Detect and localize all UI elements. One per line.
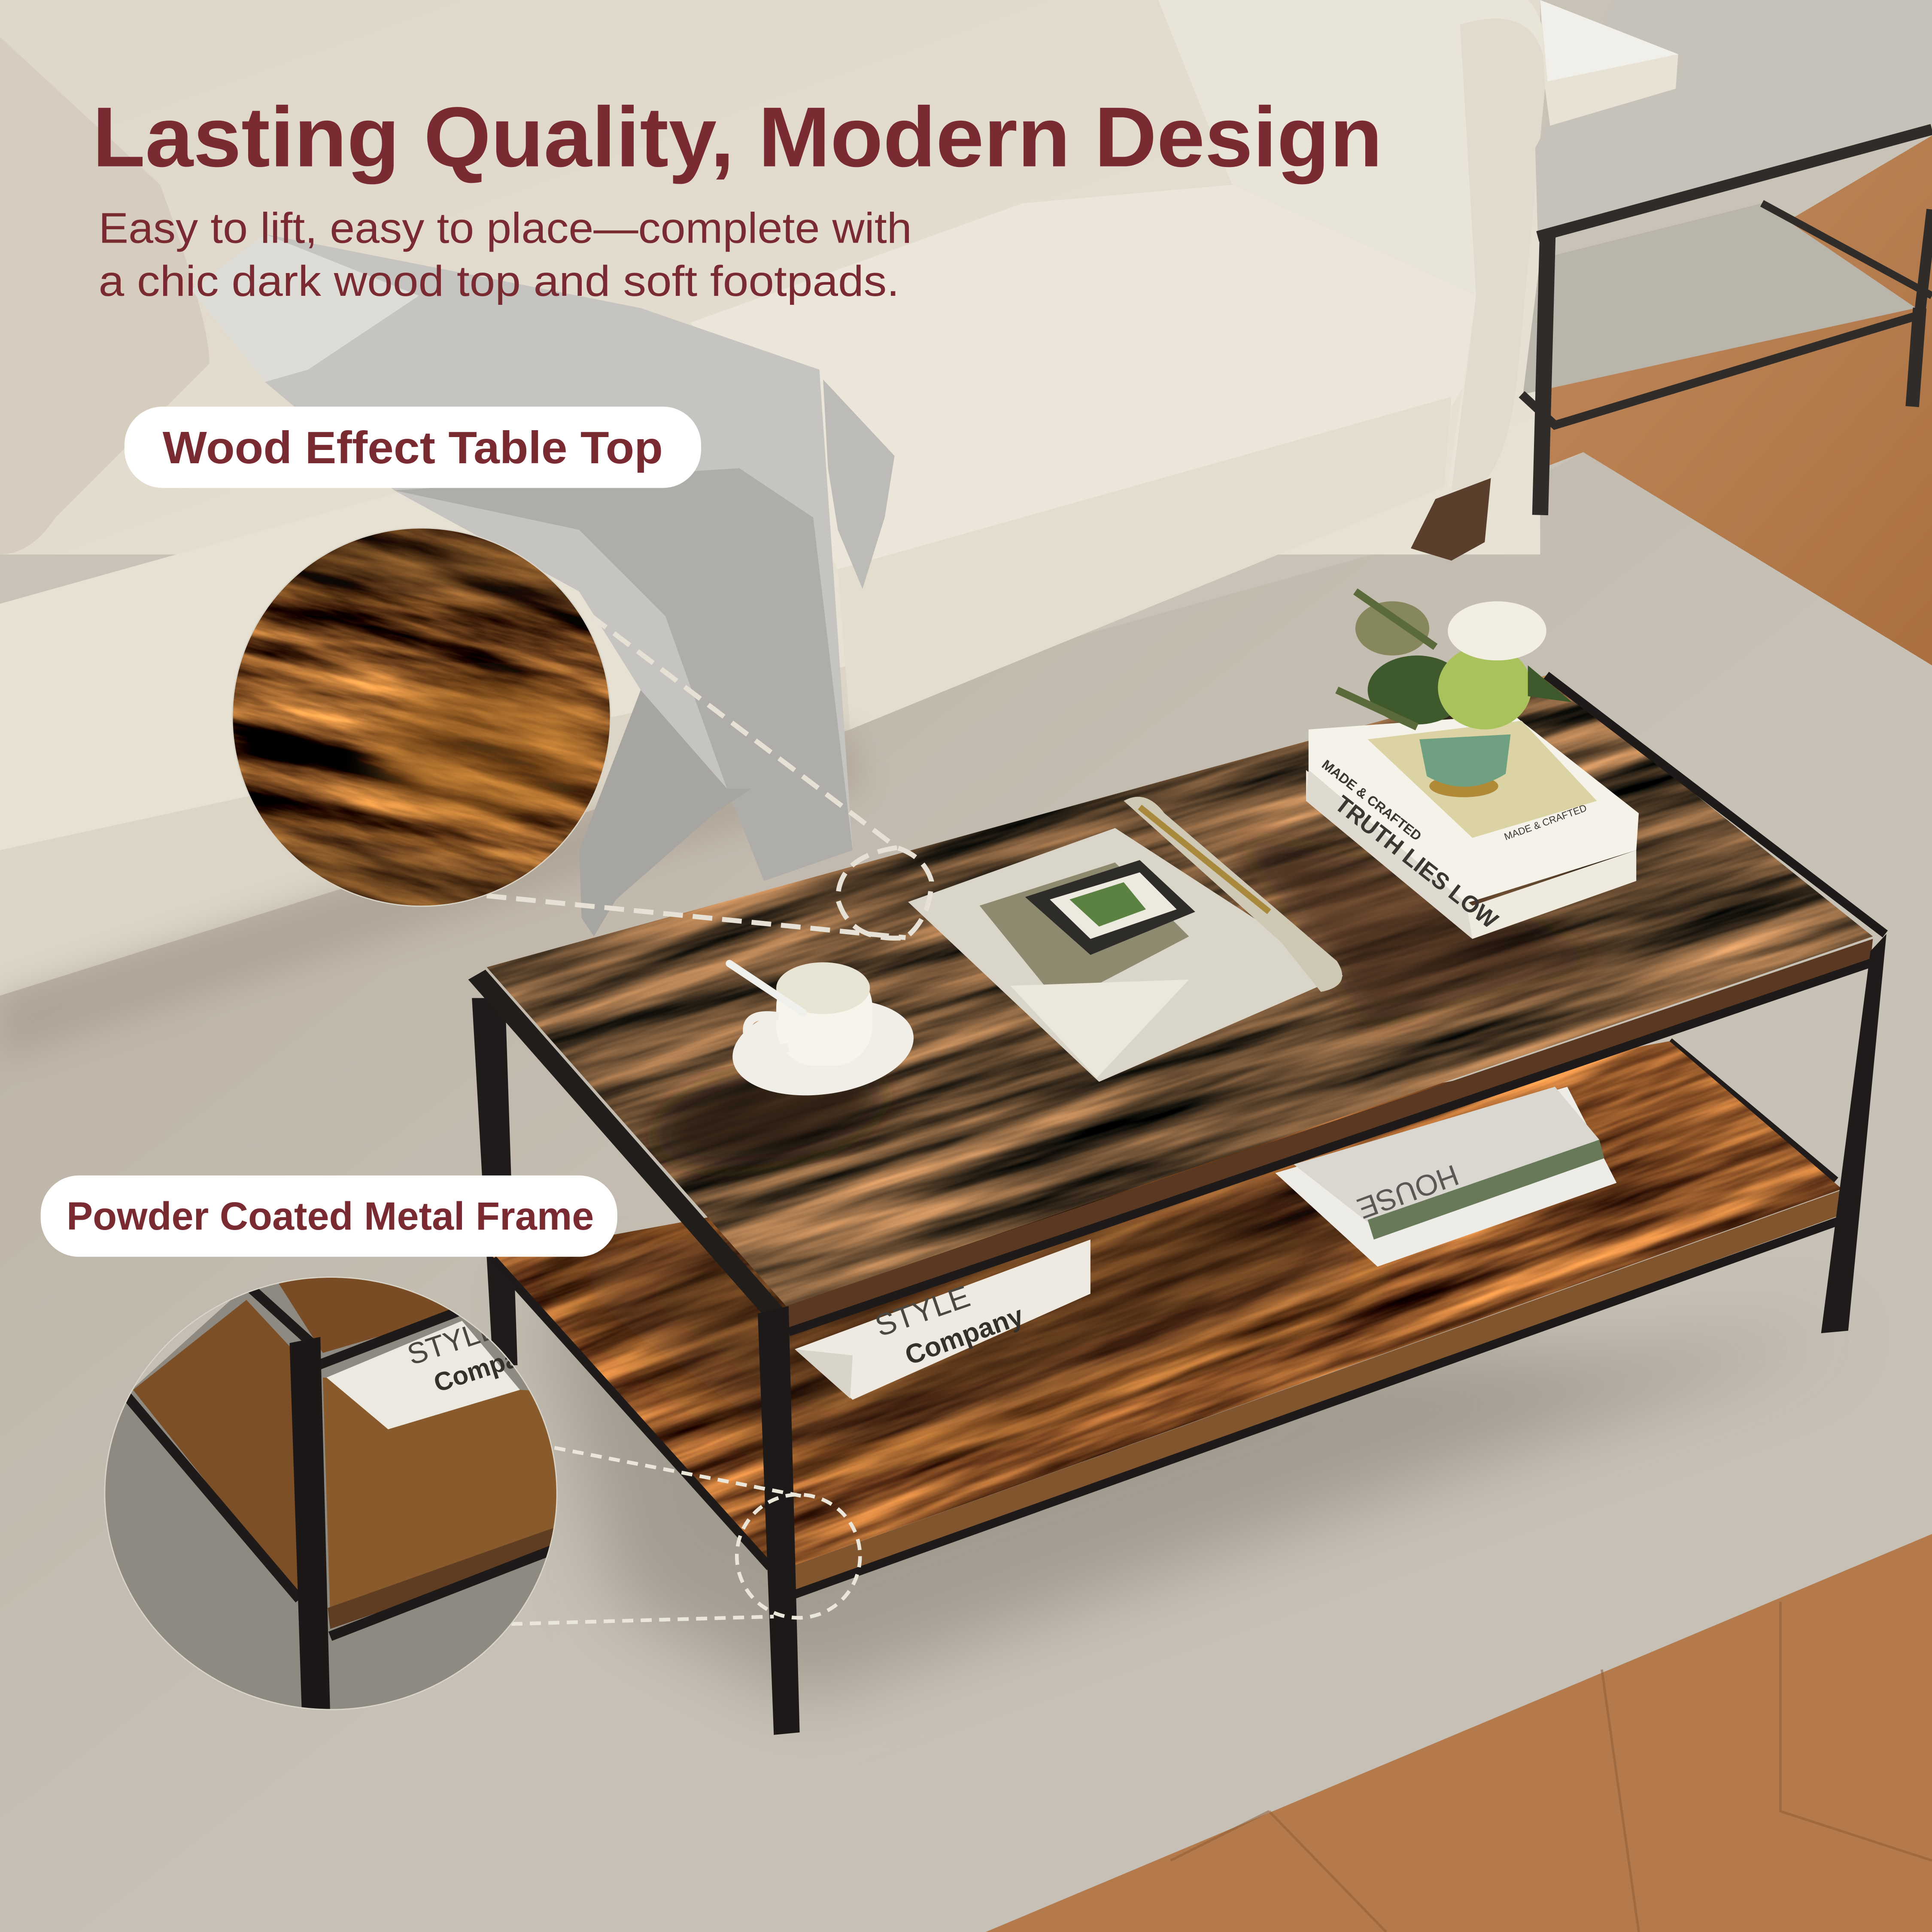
front leg — [758, 1306, 800, 1735]
grey throw blanket — [191, 234, 895, 936]
lower shelf front edge — [789, 1189, 1844, 1593]
flower vase — [1337, 592, 1572, 797]
seat cushion — [690, 185, 1476, 569]
shaded sofa and rug shadow — [0, 729, 863, 1060]
floor plank seams — [1170, 1602, 1932, 1932]
subheading: a chic dark wood top and soft footpads. — [99, 257, 899, 305]
callout label: powder coated metal frame — [41, 1176, 617, 1257]
side table frame — [1522, 129, 1932, 515]
lower right wooden floor — [986, 1534, 1932, 1932]
right shelf wood — [323, 1378, 561, 1616]
table top front edge — [786, 939, 1873, 1328]
sofa arm — [1158, 0, 1546, 487]
left shelf wood — [133, 1300, 299, 1599]
detail circle: metal frame: STYLE — [403, 1311, 503, 1371]
frame bars — [126, 1288, 552, 1636]
blanket fringe — [823, 380, 895, 589]
lower shelf book: style company: STYLE — [871, 1279, 974, 1343]
stacked books — [1306, 715, 1639, 939]
table top wood — [273, 369, 1932, 1628]
callout label: wood effect table top: Wood Effect Table Top — [163, 422, 663, 473]
side table shelf — [1523, 204, 1916, 394]
stacked books: MADE & CRAFTED — [1319, 756, 1425, 844]
sofa — [0, 0, 1546, 996]
side table books — [1540, 0, 1678, 126]
magazine roll — [1124, 797, 1342, 992]
sofa foot — [1411, 478, 1491, 561]
stacked books: TRUTH LIES LOW — [1330, 790, 1503, 934]
coffee table — [468, 671, 1888, 1735]
callout label: powder coated metal frame: Powder Coated Metal Frame — [67, 1194, 594, 1238]
sofa back — [0, 0, 1540, 554]
upper right wooden floor — [1454, 136, 1932, 671]
flower bouquet — [1337, 592, 1572, 729]
leg — [289, 1337, 330, 1715]
side table — [1522, 0, 1932, 515]
coffee cup and saucer — [726, 962, 920, 1106]
sofa seat front — [0, 394, 1454, 996]
stacked books: MADE & CRAFTED — [1503, 802, 1588, 842]
lower shelf magazines: HOUSE — [1353, 1158, 1463, 1225]
table top frame — [474, 675, 1885, 1332]
beige area rug — [0, 452, 1932, 1932]
right leg — [1821, 934, 1886, 1333]
lower shelf frame — [493, 1220, 1842, 1602]
lower shelf book: style company — [795, 1239, 1091, 1400]
open magazine — [908, 797, 1343, 1082]
subheading — [99, 204, 912, 305]
shelf edge — [328, 1525, 561, 1629]
rug zone at upper left — [105, 1269, 265, 1417]
lower shelf wood — [184, 715, 1932, 1932]
book — [327, 1321, 520, 1429]
side table top surface — [1535, 0, 1932, 234]
throw pillow — [0, 37, 210, 554]
lower shelf magazines — [1275, 1087, 1616, 1267]
detail circle: metal frame — [99, 1269, 567, 1719]
table shadow on rug — [542, 1294, 1848, 1700]
upper table wood — [273, 1275, 474, 1353]
dashed leader: metal frame detail — [511, 1448, 860, 1624]
detail circle: wood grain — [88, 386, 760, 1057]
detail circle: metal frame: Compa — [430, 1343, 523, 1397]
callout label: wood effect table top — [125, 407, 701, 488]
headline: Lasting Quality, Modern Design — [92, 89, 1382, 184]
dashed leader: wood detail — [487, 598, 932, 938]
lower shelf book: style company: Company — [901, 1300, 1027, 1371]
back left leg — [472, 998, 517, 1365]
subheading: Easy to lift, easy to place—complete with — [99, 204, 912, 252]
back right lower frame — [1670, 1041, 1836, 1180]
